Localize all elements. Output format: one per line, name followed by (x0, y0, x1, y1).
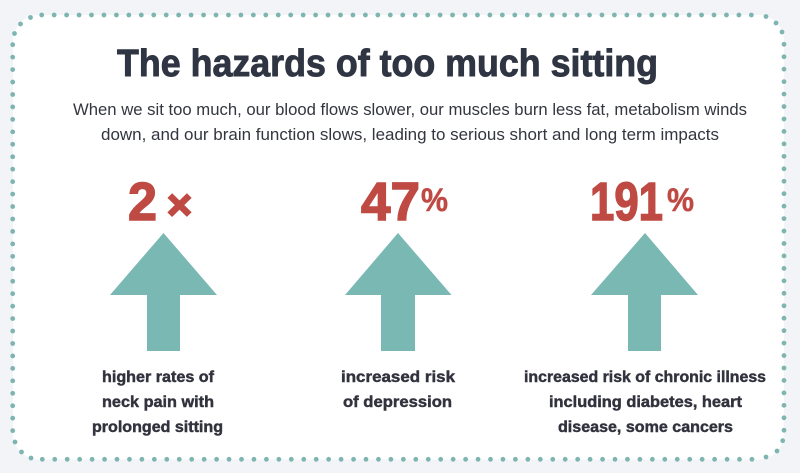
stat column: depression (341, 172, 455, 411)
statistic: 2x: 2 (128, 172, 157, 232)
statistic: 191%: 191 (590, 172, 663, 232)
statistic: 191%: % (667, 182, 694, 218)
label: chronic illness: increased risk of chronic illness (524, 369, 766, 386)
intro text: down, and our brain function slows, leading to serious short and long term impacts (101, 125, 719, 144)
intro text (73, 100, 747, 144)
label: neck pain: neck pain with (102, 394, 214, 411)
label: neck pain: prolonged sitting (92, 419, 223, 436)
statistic: 2x: × (167, 181, 192, 228)
label: chronic illness: disease, some cancers (558, 419, 733, 436)
label: neck pain: higher rates of (102, 369, 215, 386)
statistic: 2x (128, 172, 192, 232)
label: depression (341, 369, 455, 411)
icon: up arrow (345, 233, 452, 351)
label: chronic illness (524, 369, 766, 436)
label: neck pain (92, 369, 223, 436)
icon: up arrow (591, 233, 698, 351)
stat column: neck pain (92, 172, 223, 436)
label: depression: of depression (343, 394, 452, 411)
intro text: When we sit too much, our blood flows slower, our muscles burn less fat, metabolism winds (73, 100, 747, 119)
title: The hazards of too much sitting (117, 43, 658, 85)
label: chronic illness: including diabetes, heart (549, 394, 743, 411)
statistic: 47%: % (421, 182, 448, 218)
statistic: 47%: 47 (361, 172, 420, 232)
label: depression: increased risk (341, 369, 455, 386)
icon: up arrow (110, 233, 217, 351)
statistic: 47% (361, 172, 448, 232)
stat column: chronic illness (524, 172, 766, 436)
